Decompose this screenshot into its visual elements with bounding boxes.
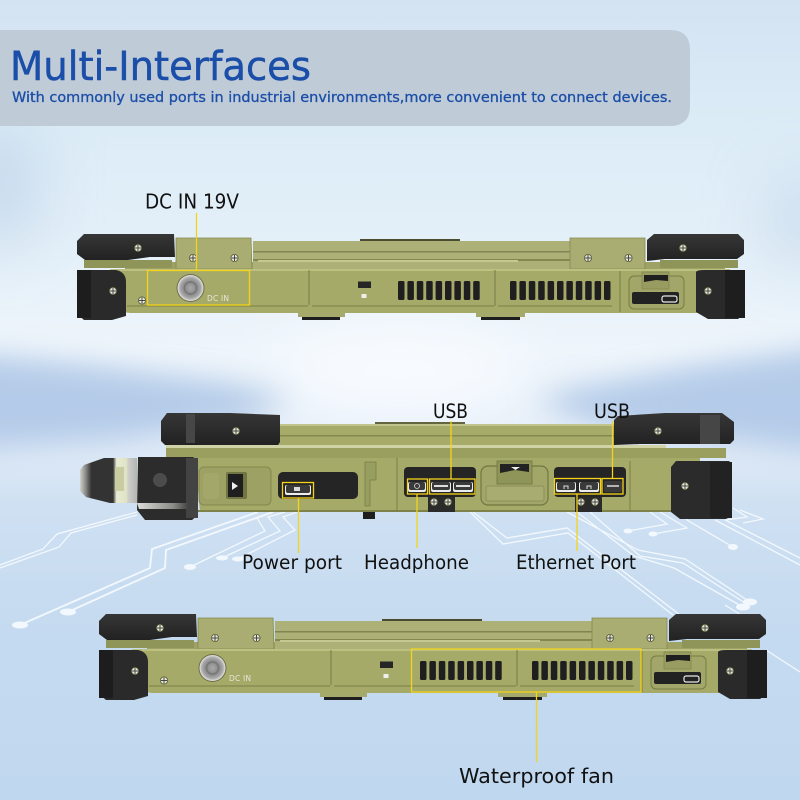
DC IN print: DC IN — [207, 294, 229, 303]
header banner — [0, 30, 690, 126]
body — [278, 424, 616, 446]
DC IN print: DC IN — [229, 674, 251, 683]
leader line: DC IN — [196, 213, 198, 270]
left top bumper — [161, 413, 280, 445]
ethernet and USB ports — [556, 482, 576, 492]
title: Multi-Interfaces — [10, 44, 311, 90]
subtitle: With commonly used ports in industrial environments,more convenient to connect devices. — [12, 90, 672, 106]
right top bumper — [614, 413, 734, 445]
hinge block right — [671, 461, 732, 519]
headphone and USB ports — [408, 482, 426, 492]
leader line: fan — [536, 692, 538, 762]
laptop view: ports side — [80, 413, 734, 520]
label: Headphone: Headphone — [364, 551, 469, 574]
power port — [285, 485, 311, 495]
DC IN highlight box — [148, 270, 250, 305]
fan highlight box — [412, 649, 641, 692]
label: Ethernet Port: Ethernet Port — [516, 551, 636, 574]
highlight boxes — [282, 478, 623, 498]
leader lines: ports — [298, 421, 612, 553]
laptop view: DC IN side — [77, 234, 745, 320]
connector tip — [80, 458, 137, 503]
label: USB right: USB — [594, 400, 630, 423]
laptop view: fan side — [99, 614, 767, 700]
label: USB left: USB — [433, 400, 468, 423]
label: DC IN 19V: DC IN 19V — [145, 190, 239, 214]
hinge block left — [137, 457, 198, 520]
label: Power port: Power port — [242, 551, 342, 574]
circuit board lines — [0, 508, 800, 672]
label: Waterproof fan: Waterproof fan — [459, 764, 614, 788]
